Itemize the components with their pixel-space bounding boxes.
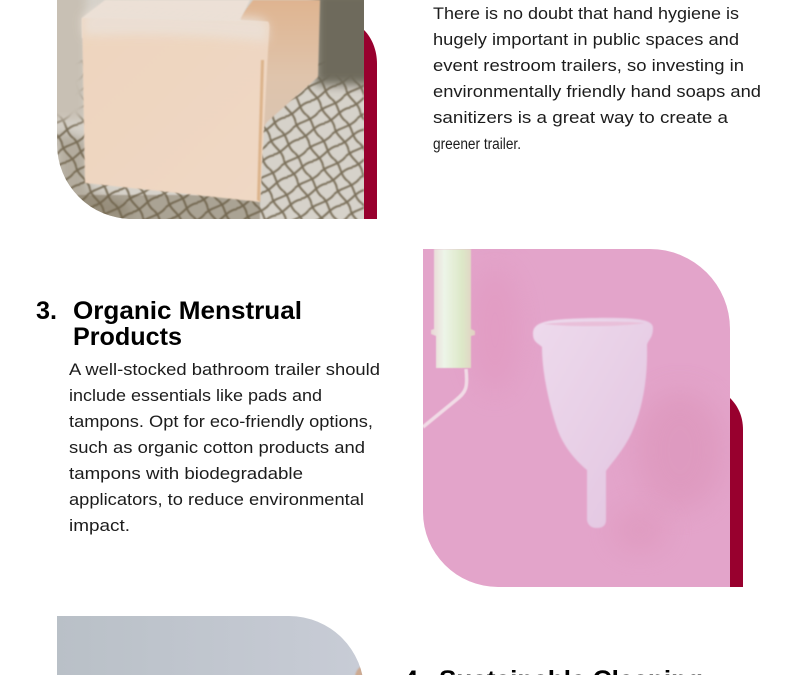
text block: menstrual products paragraph: impact. <box>69 516 130 535</box>
text block: menstrual products paragraph <box>69 360 380 535</box>
text block: hand hygiene paragraph <box>433 4 761 153</box>
panel: menstrual cup photo with red accent <box>423 249 743 587</box>
red accent bar: soap <box>364 30 377 219</box>
text block: menstrual products paragraph: such as organic cotton products and <box>69 438 365 457</box>
photo: menstrual cup and tampon on pink <box>423 249 730 587</box>
panel: cleaning photo (cropped at page bottom) <box>57 616 373 675</box>
heading: 3. Organic Menstrual Products: 3. <box>36 297 57 325</box>
text block: menstrual products paragraph: A well-stocked bathroom trailer should <box>69 360 380 379</box>
text block: hand hygiene paragraph: greener trailer. <box>433 136 521 153</box>
text block: hand hygiene paragraph: There is no doubt that hand hygiene is <box>433 4 739 23</box>
heading: 3. Organic Menstrual Products <box>36 297 302 351</box>
heading: 3. Organic Menstrual Products: Products <box>73 323 182 351</box>
text block: menstrual products paragraph: tampons. Opt for eco-friendly options, <box>69 412 373 431</box>
photo: soap bars on netting <box>57 0 364 219</box>
text block: hand hygiene paragraph: sanitizers is a great way to create a <box>433 108 729 127</box>
text block: hand hygiene paragraph: hugely important in public spaces and <box>433 30 739 49</box>
text block: menstrual products paragraph: tampons with biodegradable <box>69 464 303 483</box>
text block: menstrual products paragraph: include essentials like pads and <box>69 386 322 405</box>
text block: hand hygiene paragraph: event restroom trailers, so investing in <box>433 56 744 75</box>
text block: menstrual products paragraph: applicators, to reduce environmental <box>69 490 364 509</box>
heading: 3. Organic Menstrual Products: Organic Menstrual <box>73 297 302 325</box>
text block: hand hygiene paragraph: environmentally friendly hand soaps and <box>433 82 761 101</box>
red accent bar: cup <box>730 398 743 587</box>
panel: natural soap photo with red accent <box>40 0 377 225</box>
